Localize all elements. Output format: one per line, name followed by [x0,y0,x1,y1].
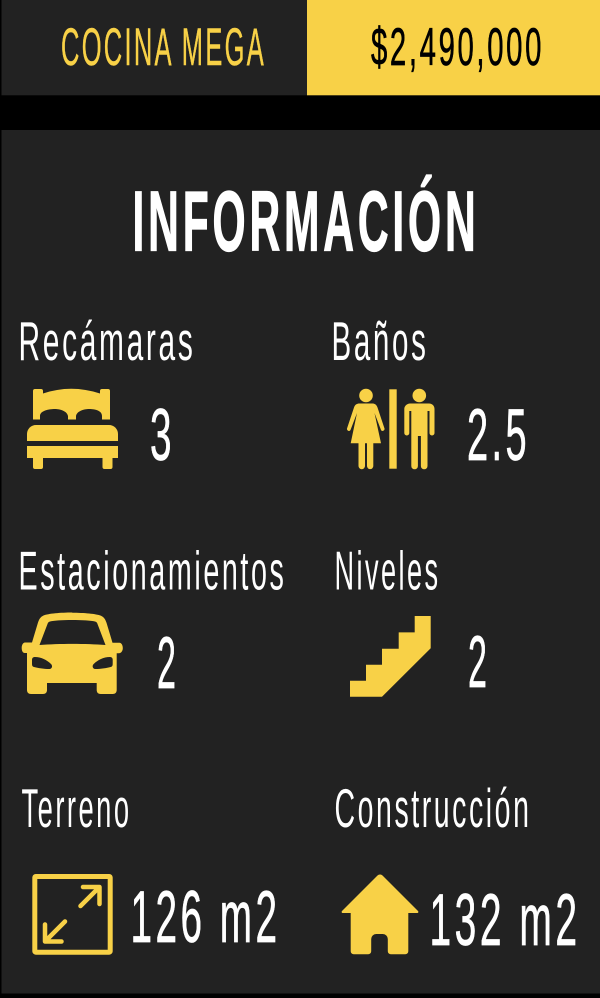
price background [307,0,600,95]
label: bedrooms: Recámaras [18,310,196,372]
panel: information: Niveles [334,540,440,602]
panel: information: 2 [157,623,179,704]
label: parking: Estacionamientos [18,540,286,602]
icon: car [22,612,123,694]
icon: bed [27,389,118,469]
value: land area: 126 m2 [130,877,280,958]
panel: information: Terreno [22,777,132,839]
panel: header [2,0,600,95]
panel: information: 2 [468,622,490,703]
icon: stairs [350,616,431,697]
value: bathrooms: 2.5 [467,395,530,476]
icon: house [342,874,418,954]
label: bathrooms: Baños [332,310,428,372]
value: bedrooms: 3 [150,395,175,476]
panel: header: COCINA MEGA [61,18,266,77]
icon: restroom [347,389,434,469]
icon: expand [35,876,110,952]
